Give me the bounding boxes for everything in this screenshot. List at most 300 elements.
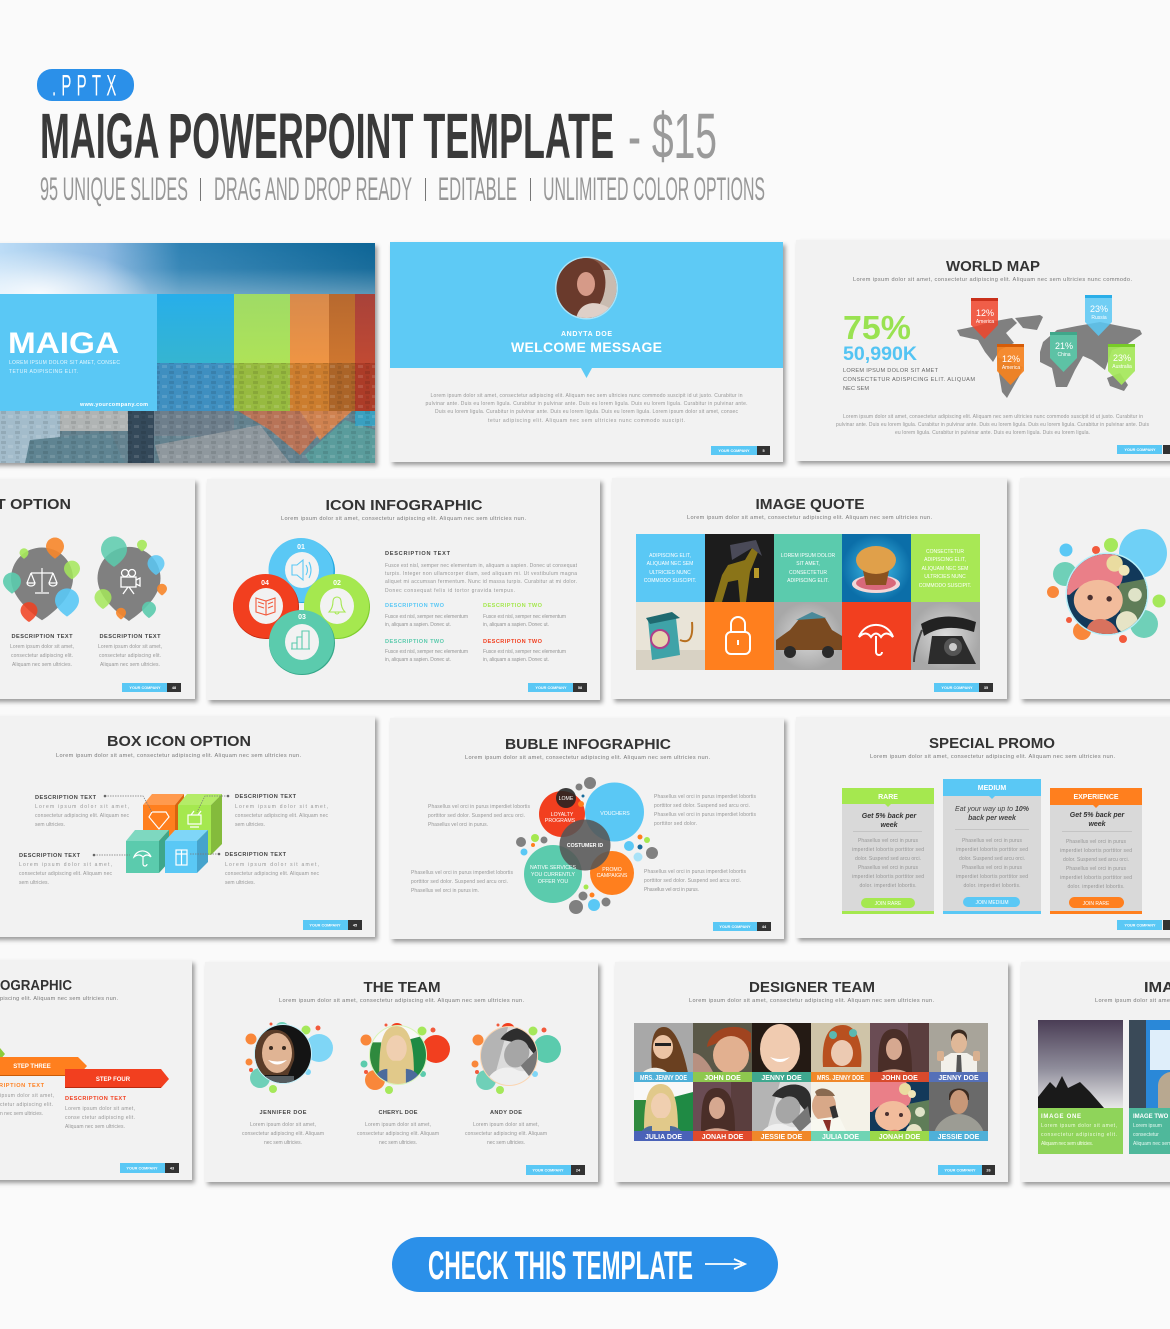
subtitle: EDITABLE <box>438 171 517 207</box>
world map <box>957 315 1142 398</box>
text top left: porttitor sed dolor. Suspend sed arcu orci. <box>428 813 525 819</box>
captions: consectetur adipiscing elit. <box>11 653 73 659</box>
member: Jennifer: JENNIFER DOE <box>260 1110 307 1116</box>
heading: BOX ICON OPTION <box>107 734 251 750</box>
member: Jennifer: nec sem ultricies. <box>264 1140 302 1146</box>
footer tag <box>711 446 770 455</box>
description columns: DESCRIPTION TWO <box>385 639 445 645</box>
callout top right: consectetur adipiscing elit. Aliquam nec <box>235 813 328 819</box>
text top right: porttitor sed dolor. Suspend sed arcu orci. <box>654 803 750 809</box>
photo: muffin <box>842 534 911 602</box>
icon: movie camera <box>121 570 140 594</box>
photo: Jessie Doe <box>752 1082 811 1141</box>
pin: America red: 12% <box>976 308 994 318</box>
pin: America orange: America <box>1002 365 1020 371</box>
slide: image quote <box>612 478 1007 699</box>
photo: Julia Doe: JULIA DOE <box>645 1134 682 1141</box>
callout top left: DESCRIPTION TEXT <box>35 795 97 801</box>
heading: OGRAPHIC <box>0 978 72 994</box>
ring 01 <box>268 538 335 603</box>
footer tag: YOUR COMPANY <box>129 686 161 690</box>
card: experience: dolor. imperdiet lobortis. <box>1068 884 1124 890</box>
ring 04: 04 <box>261 580 269 587</box>
card: rare: imperdiet lobortis porttitor sed <box>852 847 924 853</box>
text top left: Phasellus vel orci in purus imperdiet lobortis <box>428 804 530 810</box>
description block: aliquet mi accumsan fermentum. Nunc id massa turpis. Curabitur at mi dolor. <box>385 579 577 585</box>
card: experience: dolor. Suspend sed arcu orci. <box>1063 857 1129 863</box>
arrow step three: STEP THREE <box>13 1064 51 1070</box>
card: image two: Lorem ipsum <box>1133 1123 1162 1129</box>
member: Andy: nec sem ultricies. <box>487 1140 525 1146</box>
ring 02: 02 <box>333 580 341 587</box>
card: medium: back per week <box>968 815 1017 822</box>
footer tag: YOUR COMPANY <box>1124 924 1156 928</box>
description columns: in, aliquam a sapien. Donec ut. <box>483 657 549 663</box>
photo: Jessie Doe 2: JESSIE DOE <box>938 1134 980 1141</box>
description block: turpis. Integer non ullamcorper diam, sed aliquam mi. Ut vestibulum magna <box>385 571 577 577</box>
captions: Aliquam nec sem ultricies. <box>100 662 160 668</box>
pin: Australia: 23% <box>1113 353 1131 363</box>
text bottom left: Phasellus vel orci in purus imperdiet lobortis <box>411 870 514 876</box>
step three text: RIPTION TEXT <box>0 1083 45 1089</box>
card: medium: JOIN MEDIUM <box>975 900 1009 906</box>
photo: Julia Doe 2: JULIA DOE <box>822 1134 859 1141</box>
footer tag <box>1117 920 1170 930</box>
callout top left: Lorem ipsum dolor sit amet, <box>35 804 129 810</box>
card: rare: dolor. imperdiet lobortis. <box>860 883 916 889</box>
description block: DESCRIPTION TEXT <box>385 551 451 557</box>
avatar <box>555 256 620 320</box>
pin: America orange <box>997 344 1024 385</box>
call to action button <box>392 1237 778 1292</box>
member: Andy: Lorem ipsum dolor sit amet, <box>473 1122 539 1128</box>
quote cell blue: COMMODO SUSCIPIT. <box>644 578 696 584</box>
stat: 50,990K <box>843 344 917 365</box>
sub heading: Lorem ipsum dolor sit amet, consectetur adipiscing elit. Aliquam nec sem ultricies nun. <box>281 516 526 522</box>
ring 04 <box>233 574 299 639</box>
icon: arrow <box>705 1259 745 1269</box>
member: Cheryl: Lorem ipsum dolor sit amet, <box>365 1122 431 1128</box>
footer tag: 44 <box>762 925 767 929</box>
photo: Mrs. Jenny Doe 2 <box>811 1023 870 1082</box>
card: rare: Phasellus vel orci in purus <box>858 838 918 844</box>
quote cell blue <box>636 534 705 602</box>
card: experience: imperdiet lobortis porttitor sed <box>1060 875 1132 881</box>
slide: world map <box>796 240 1170 461</box>
sub heading: Lorem ipsum dolor sit amet, consectetur adipiscing elit. Aliquam nec sem ultricies nun. <box>870 754 1115 760</box>
photo: Jessie Doe: JESSIE DOE <box>761 1134 803 1141</box>
footer tag: YOUR COMPANY <box>309 924 341 928</box>
card: experience: Phasellus vel orci in purus <box>1066 866 1126 872</box>
arrow step three <box>0 1048 87 1076</box>
card: image one: IMAGE ONE <box>1041 1114 1081 1120</box>
member: Andy <box>465 1023 561 1146</box>
captions: Lorem ipsum dolor sit amet, <box>10 644 74 650</box>
card: experience: JOIN RARE <box>1083 901 1110 907</box>
card: rare: imperdiet lobortis porttitor sed <box>852 874 924 880</box>
photo: Mrs. Jenny Doe <box>634 1023 693 1082</box>
photo: John Doe 2: JOHN DOE <box>881 1075 918 1082</box>
box blue <box>165 830 208 873</box>
card: image two: IMAGE TWO <box>1133 1114 1169 1120</box>
card: experience <box>1050 788 1142 914</box>
bubble chart: NATIVE SERVICES <box>530 865 577 871</box>
slide: Maiga cover <box>0 243 375 463</box>
heading: SPECIAL PROMO <box>929 736 1055 752</box>
sky photo <box>0 243 375 294</box>
pin: Russia: Russia <box>1091 315 1107 321</box>
slide: welcome message <box>390 242 783 462</box>
card: experience: EXPERIENCE <box>1073 794 1119 801</box>
callout bottom right: Lorem ipsum dolor sit amet, <box>225 862 319 868</box>
callout bottom right: DESCRIPTION TEXT <box>225 852 287 858</box>
sub heading: Lorem ipsum dolor sit ame <box>1095 998 1170 1004</box>
cover url: www.yourcompany.com <box>79 402 148 408</box>
footer tag: YOUR COMPANY <box>532 1168 564 1172</box>
pin: Australia: Australia <box>1112 364 1132 370</box>
bubble chart: LOME <box>559 796 574 802</box>
photo: Jonah Doe: JONAH DOE <box>702 1134 744 1141</box>
footer tag: 45 <box>353 924 357 928</box>
sub heading: Lorem ipsum dolor sit amet, consectetur adipiscing elit. Aliquam nec sem ultricies nun. <box>56 753 301 759</box>
card: medium: imperdiet lobortis porttitor sed <box>956 874 1028 880</box>
quote cell teal: ADIPISCING ELIT. <box>787 578 829 584</box>
photo: Jonah Doe 2: JONAH DOE <box>879 1134 921 1141</box>
slide: box icon option <box>0 716 375 937</box>
member: Andy: ANDY DOE <box>490 1110 522 1116</box>
text bottom left: porttitor sed dolor. Suspend sed arcu orci. <box>411 879 508 885</box>
quote cell green: ADIPISCING ELIT, <box>924 557 966 563</box>
description block <box>385 551 578 594</box>
stat text: NEC SEM <box>843 386 869 392</box>
body text: Lorem ipsum dolor sit amet, consectetur adipiscing elit. Aliquam nec sem ultricies nunc commodo suscipit id ut justo. Curabitur in <box>843 414 1143 420</box>
photo: Jonah Doe <box>693 1082 752 1141</box>
cover text: LOREM IPSUM DOLOR SIT AMET, CONSEC <box>9 360 120 366</box>
description columns: in, aliquam a sapien. Donec ut. <box>483 622 549 628</box>
footer tag: YOUR COMPANY <box>535 686 567 690</box>
box teal <box>126 830 169 873</box>
slide: icon infographic <box>207 479 600 700</box>
pin: America orange: 12% <box>1002 354 1020 364</box>
captions: Aliquam nec sem ultricies. <box>12 662 72 668</box>
quote cell green: ULTRICIES NUNC <box>924 574 966 580</box>
footer tag: YOUR COMPANY <box>718 449 750 453</box>
card: experience: Get 5% back per <box>1070 812 1126 819</box>
photo: John Doe: JOHN DOE <box>704 1075 741 1082</box>
callout bottom left: DESCRIPTION TEXT <box>19 853 81 859</box>
footer tag: YOUR COMPANY <box>1124 448 1156 452</box>
card: image one: Lorem ipsum dolor sit amet, <box>1041 1123 1117 1129</box>
cover text: TETUR ADIPISCING ELIT. <box>9 369 78 375</box>
step four text: Aliquam nec sem ultricies. <box>65 1124 125 1130</box>
callout bottom right <box>190 852 320 886</box>
photo: vintage car <box>774 602 842 670</box>
footer tag <box>526 1165 585 1175</box>
icon cell: umbrella <box>842 602 911 670</box>
description columns <box>385 603 566 663</box>
member: Cheryl: CHERYL DOE <box>378 1110 418 1116</box>
footer tag: 5 <box>762 449 765 453</box>
card: medium: Phasellus vel orci in purus <box>962 838 1022 844</box>
quote cell green <box>911 534 980 602</box>
card: experience: week <box>1088 821 1107 828</box>
footer tag <box>938 1165 995 1175</box>
welcome body: Duis eu lorem ligula. Curabitur in pulvinar ante. Duis eu lorem ligula. Duis eu lorem ligula. Lorem ipsum dolor sit amet, consec <box>435 409 738 415</box>
quote cell teal: SIT AMET, <box>796 561 820 567</box>
photo: washing machine <box>636 602 705 670</box>
step three text: ipsum dolor sit amet, <box>0 1093 54 1099</box>
photo: John Doe 2 <box>870 1023 929 1082</box>
callout top left: sem ultricies. <box>35 822 65 828</box>
description columns: in, aliquam a sapien. Donec ut. <box>385 622 451 628</box>
footer tag <box>303 920 362 930</box>
card: medium: dolor. imperdiet lobortis. <box>964 883 1020 889</box>
bubble chart: LOYALTY <box>551 812 574 818</box>
card: medium: Phasellus vel orci in purus <box>962 865 1022 871</box>
card: image one: Aliquam nec sem ultricies. <box>1041 1141 1093 1147</box>
footer tag: YOUR COMPANY <box>126 1166 158 1170</box>
text top left <box>428 804 530 828</box>
member: Andy: consectetur adipiscing elit. Aliquam <box>465 1131 547 1137</box>
city photo strip <box>0 411 375 463</box>
card: image two <box>1129 1020 1170 1154</box>
callout bottom left: consectetur adipiscing elit. Aliquam nec <box>19 871 112 877</box>
icon: scales <box>27 568 57 593</box>
callout top right: DESCRIPTION TEXT <box>235 794 297 800</box>
footer tag <box>120 1163 179 1173</box>
stat text: LOREM IPSUM DOLOR SIT AMET <box>843 368 939 374</box>
callout bottom left: sem ultricies. <box>19 880 49 886</box>
text top right <box>654 794 756 827</box>
bubble chart <box>516 777 658 914</box>
text bottom right <box>644 869 746 893</box>
footer tag: YOUR COMPANY <box>944 1168 976 1172</box>
card: medium: imperdiet lobortis porttitor sed <box>956 847 1028 853</box>
slide: step infographic <box>0 960 192 1180</box>
heading: WORLD MAP <box>946 259 1040 275</box>
heading: THE TEAM <box>364 980 440 996</box>
member: Jennifer: consectetur adipiscing elit. Aliquam <box>242 1131 324 1137</box>
quote cell teal: CONSECTETUR <box>789 570 827 576</box>
card: medium <box>943 779 1041 914</box>
balloon scales <box>3 538 80 622</box>
description columns: DESCRIPTION TWO <box>385 603 445 609</box>
sub heading: Lorem ipsum dolor sit amet, consectetur adipiscing elit. Aliquam nec sem ultricies nun. <box>687 515 932 521</box>
footer tag: 58 <box>578 686 582 690</box>
text bottom right: porttitor sed dolor. Suspend sed arcu orci. <box>644 878 741 884</box>
photo: mechanical dog <box>705 534 774 602</box>
quote cell blue: ADIPISCING ELIT, <box>649 553 691 559</box>
photo: Jonah Doe 2 <box>870 1082 929 1141</box>
title: MAIGA POWERPOINT TEMPLATE <box>40 100 614 172</box>
bubbles <box>1047 529 1167 643</box>
card: experience: Phasellus vel orci in purus <box>1066 839 1126 845</box>
card: medium: dolor. Suspend sed arcu orci. <box>959 856 1025 862</box>
member: Jennifer <box>242 1020 333 1146</box>
footer tag: 48 <box>172 686 176 690</box>
footer tag <box>528 683 587 692</box>
card: rare: JOIN RARE <box>875 901 902 907</box>
description block: Fusce est nisl, semper nec elementum in, aliquam a sapien. Donec ut consequat <box>385 563 578 569</box>
callout bottom right: sem ultricies. <box>225 880 255 886</box>
photo: John Doe <box>693 1023 752 1082</box>
card: rare: dolor. Suspend sed arcu orci. <box>855 856 921 862</box>
bubble chart: CAMPAIGNS <box>597 873 628 879</box>
member: Jennifer: Lorem ipsum dolor sit amet, <box>250 1122 316 1128</box>
arrow step four: STEP FOUR <box>96 1077 131 1083</box>
slide: text option balloons <box>0 479 195 699</box>
step four text <box>65 1096 135 1130</box>
text bottom left: Phasellus vel orci in purus im. <box>411 888 479 894</box>
ring 03: 03 <box>298 614 306 621</box>
text top right: Phasellus vel orci in purus imperdiet lobortis <box>654 812 756 818</box>
quote cell teal: LOREM IPSUM DOLOR <box>781 553 835 559</box>
text bottom right: Phasellus vel orci in purus. <box>644 887 699 893</box>
card: medium: Eat your way up to 10% <box>955 806 1030 813</box>
card: rare: RARE <box>878 794 898 801</box>
sub heading: Lorem ipsum dolor sit amet, consectetur adipiscing elit. Aliquam nec sem ultricies nun. <box>689 998 934 1004</box>
pin: China: China <box>1057 352 1071 358</box>
sub heading: Lorem ipsum dolor sit amet, consectetur adipiscing elit. Aliquam nec sem ultricies nun. <box>465 755 710 761</box>
body text: eu lorem ligula. Curabitur in pulvinar ante. Duis eu lorem ligula. Duis eu lorem ligula. <box>895 430 1090 436</box>
heading: DESIGNER TEAM <box>749 980 875 996</box>
callout top right: Lorem ipsum dolor sit amet, <box>235 804 328 810</box>
body text: pulvinar ante. Duis eu lorem ligula. Curabitur in pulvinar ante. Duis eu lorem ligula. Duis eu lorem ligula. Curabitur in pulvinar ante. Duis <box>836 422 1150 428</box>
description columns: Fusce est nisl, semper nec elementum <box>483 649 566 655</box>
subtitle <box>40 171 765 207</box>
slide: bubble infographic <box>390 718 784 939</box>
sub heading: piscing elit. Aliquam nec sem ultricies nun. <box>0 996 118 1002</box>
text bottom left <box>411 870 514 894</box>
box green <box>178 794 222 855</box>
member: Cheryl <box>357 1023 450 1146</box>
quote cell green: CONSECTETUR <box>926 549 964 555</box>
slide: circular portrait <box>1020 478 1170 699</box>
bubble chart: COSTUMER ID <box>567 843 603 849</box>
icon cell: lock <box>705 602 774 670</box>
description columns: Fusce est nisl, semper nec elementum <box>385 614 468 620</box>
footer tag: 35 <box>984 686 988 690</box>
slide: special promo <box>796 717 1170 938</box>
slide: the team <box>205 962 598 1182</box>
callout bottom left <box>19 853 130 886</box>
sub heading: Lorem ipsum dolor sit amet, consectetur adipiscing elit. Aliquam nec sem ultricies nun. <box>279 998 524 1004</box>
footer tag: 43 <box>170 1166 174 1170</box>
callout top right <box>197 794 328 828</box>
bubble chart: VOUCHERS <box>600 811 630 817</box>
bubble chart: PROMO <box>602 867 622 873</box>
footer tag: YOUR COMPANY <box>941 686 973 690</box>
card: rare <box>842 788 934 914</box>
step four text: Lorem ipsum dolor sit amet, <box>65 1106 135 1112</box>
description columns: Fusce est nisl, semper nec elementum <box>385 649 468 655</box>
heading: ICON INFOGRAPHIC <box>326 498 483 514</box>
portrait: flower girl <box>1066 552 1148 636</box>
arrow step four <box>65 1069 169 1088</box>
cover text <box>9 360 120 375</box>
sub heading: Lorem ipsum dolor sit amet, consectetur adipiscing elit. Aliquam nec sem ultricies nunc commodo. <box>853 277 1132 283</box>
subtitle: 95 UNIQUE SLIDES <box>40 171 188 207</box>
callout top right: sem ultricies. <box>235 822 265 828</box>
pin: China <box>1050 332 1077 372</box>
welcome body: pulvinar ante. Duis eu lorem ligula. Curabitur in pulvinar ante. Duis eu lorem ligula. Duis eu lorem ligula. Curabitur in pulvinar ante. <box>426 401 748 407</box>
card: rare: week <box>880 822 899 829</box>
author name: ANDYTA DOE <box>561 331 612 338</box>
callout top left <box>35 795 152 828</box>
captions <box>10 634 162 668</box>
step three text: n nec sem ultricies. <box>0 1111 43 1117</box>
pin: China: 21% <box>1055 341 1073 351</box>
bubble chart: PROGRAMS <box>545 818 576 824</box>
footer tag <box>934 683 993 692</box>
footer tag <box>713 922 771 931</box>
slide: image cards <box>1021 962 1170 1182</box>
member: Cheryl: consectetur adipiscing elit. Aliquam <box>357 1131 439 1137</box>
pin: Russia: 23% <box>1090 304 1108 314</box>
quote cell green: ALIQUAM NEC SEM <box>922 566 968 572</box>
ring 03 <box>269 610 335 675</box>
colour band <box>0 294 375 411</box>
big percent: 75% <box>843 309 911 346</box>
step three text <box>0 1083 54 1117</box>
stat text: CONSECTETUR ADISPICING ELIT. ALIQUAM <box>843 377 975 383</box>
card: image one: consectetur adipiscing elit. <box>1041 1132 1117 1138</box>
call to action button: CHECK THIS TEMPLATE <box>428 1244 693 1288</box>
photo: Jenny Doe 2 <box>929 1023 988 1082</box>
text bottom right: Phasellus vel orci in purus imperdiet lobortis <box>644 869 746 875</box>
photo: Jenny Doe <box>752 1023 811 1082</box>
subtitle: DRAG AND DROP READY <box>214 171 412 207</box>
description columns: Fusce est nisl, semper nec elementum <box>483 614 566 620</box>
heading: BUBLE INFOGRAPHIC <box>505 737 672 753</box>
card: medium: MEDIUM <box>978 785 1006 792</box>
callout bottom right: consectetur adipiscing elit. Aliquam nec <box>225 871 320 877</box>
quote cell green: COMMODO SUSCIPIT. <box>919 583 971 589</box>
quote cell teal <box>774 534 842 602</box>
heading: IMAGE QUOTE <box>756 497 865 513</box>
image grid <box>636 534 980 670</box>
price: - $15 <box>628 100 717 172</box>
step three text: ctetur adipiscing elit. <box>0 1102 53 1108</box>
card: image two: consectetur <box>1133 1132 1159 1138</box>
photo: Jenny Doe: JENNY DOE <box>761 1075 802 1082</box>
text top right: porttitor sed dolor. <box>654 821 697 827</box>
bubble chart: OFFER YOU <box>538 879 568 885</box>
text: UNLIMITED COLOR OPTIONS <box>543 171 765 207</box>
slide: designer team <box>615 962 1008 1182</box>
captions: DESCRIPTION TEXT <box>100 634 161 640</box>
text top left: Phasellus vel orci in purus. <box>428 822 488 828</box>
pin: Russia <box>1085 295 1112 336</box>
step four text: DESCRIPTION TEXT <box>65 1096 127 1102</box>
captions: consectetur adipiscing elit. <box>99 653 161 659</box>
body text <box>836 414 1150 436</box>
card: rare: Phasellus vel orci in purus <box>858 865 918 871</box>
photo: Jenny Doe 2: JENNY DOE <box>938 1075 979 1082</box>
photo: black telephone <box>911 602 980 670</box>
welcome body <box>426 393 748 424</box>
heading: IMA <box>1144 980 1170 996</box>
welcome body: Lorem ipsum dolor sit amet, consectetur adipiscing elit. Aliquam nec sem ultricies nunc commodo suscipit id ut justo. Curabitur in <box>430 393 743 399</box>
description columns: DESCRIPTION TWO <box>483 603 543 609</box>
ring 01: 01 <box>297 544 305 551</box>
callout bottom left: Lorem ipsum dolor sit amet, <box>19 862 112 868</box>
quote cell blue: ALIQUAM NEC SEM <box>647 561 693 567</box>
footer tag <box>1117 445 1170 454</box>
pin: America red <box>971 298 998 339</box>
badge: .PPTX: .PPTX <box>52 70 122 103</box>
callout top left: consectetur adipiscing elit. Aliquam nec <box>35 813 130 819</box>
